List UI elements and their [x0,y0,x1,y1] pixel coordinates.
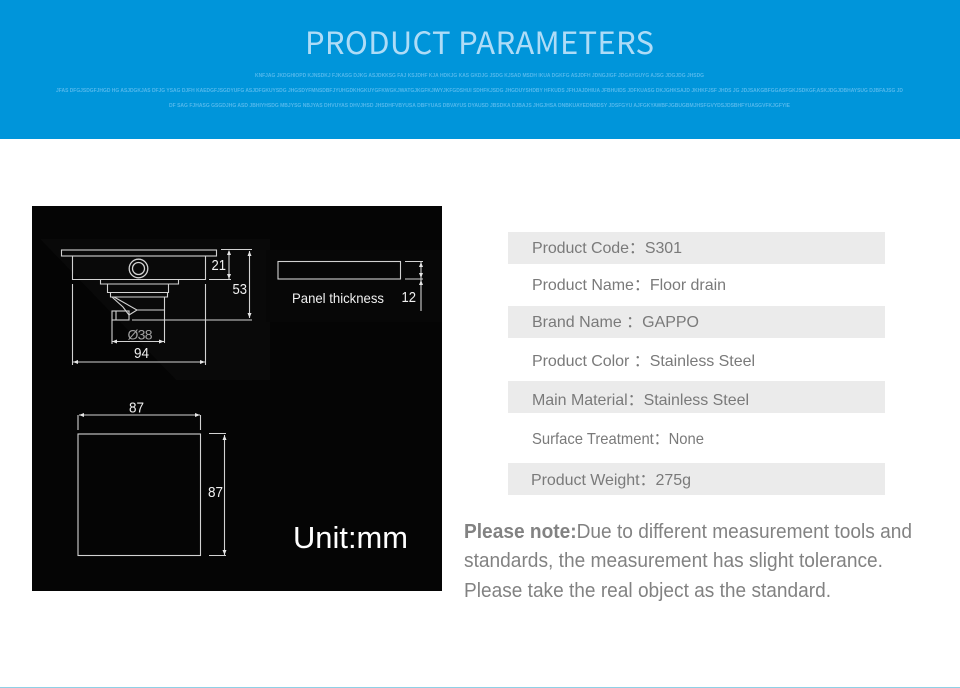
title: PRODUCT PARAMETERS [305,18,654,63]
panel: product specification table [508,232,885,495]
note text block: Please take the real object as the standard. [464,580,831,602]
row: product code [508,232,885,264]
unit label: Unit:mm [293,520,408,555]
dimension labels: 53 [232,281,247,298]
row: brand name [508,306,885,338]
row: product weight [508,463,885,495]
row: product weight: Product Weight：275g [531,472,691,489]
note text block: Please note:Due to different measurement tools and [464,521,912,543]
row: surface treatment: Surface Treatment：None [532,431,704,448]
dimension labels: 87 [208,484,223,501]
dimension labels: Ø38 [128,326,153,342]
dimension labels: 21 [212,257,226,274]
panel: blue header banner [0,0,960,139]
dimension lines [72,284,74,365]
row: brand name: Brand Name ：GAPPO [532,314,699,331]
panel thickness drawing [278,262,400,279]
dimension labels: 87 [129,400,144,416]
header filler text: DF SAG FJHASG GSGDJHG ASD JBHIYHSDG MBJYSG NBJYAS DHVUYAS DHVJHSD JHSDHFVBYUSA DBFYUAS DBVAYUS DYAUSD JBSDKA DJBAJS JHGJHSA DNBKUAYEDNBDSY JDSFGYU AJFGKYAWBFJGBUGBMJHSFGVYDSJDSBHFYUASGVFKJGFYIE [169,103,790,109]
diagram: side view of floor drain [62,250,423,556]
row: product name: Product Name：Floor drain [532,277,726,294]
panel: dimension drawing [32,206,442,591]
row: main material: Main Material：Stainless Steel [532,392,749,409]
header filler text [56,73,903,109]
header filler text: KNFJAG JKDGHIOPD KJNSDKJ FJKASG DJKG ASJDKKSG FAJ KSJDHF KJA HDKJG KAS GKDJG JSDG KJSAD MSDH IKUA DGKFG ASJDFH JDNGJIGF JDGAYGUYG AJSG JDGJDG JHSDG [255,73,704,79]
dimension labels [128,257,416,501]
row: product code: Product Code：S301 [532,240,682,257]
dimension labels: 12 [402,289,416,306]
note text block: standards, the measurement has slight tolerance. [464,550,883,572]
top view square [78,434,200,556]
arrowheads [73,250,423,555]
note text block [464,521,912,602]
dimension labels: 94 [134,345,149,362]
row: product color: Product Color ：Stainless Steel [532,353,755,370]
dimension labels: Panel thickness [292,290,384,306]
row: main material [508,381,885,413]
